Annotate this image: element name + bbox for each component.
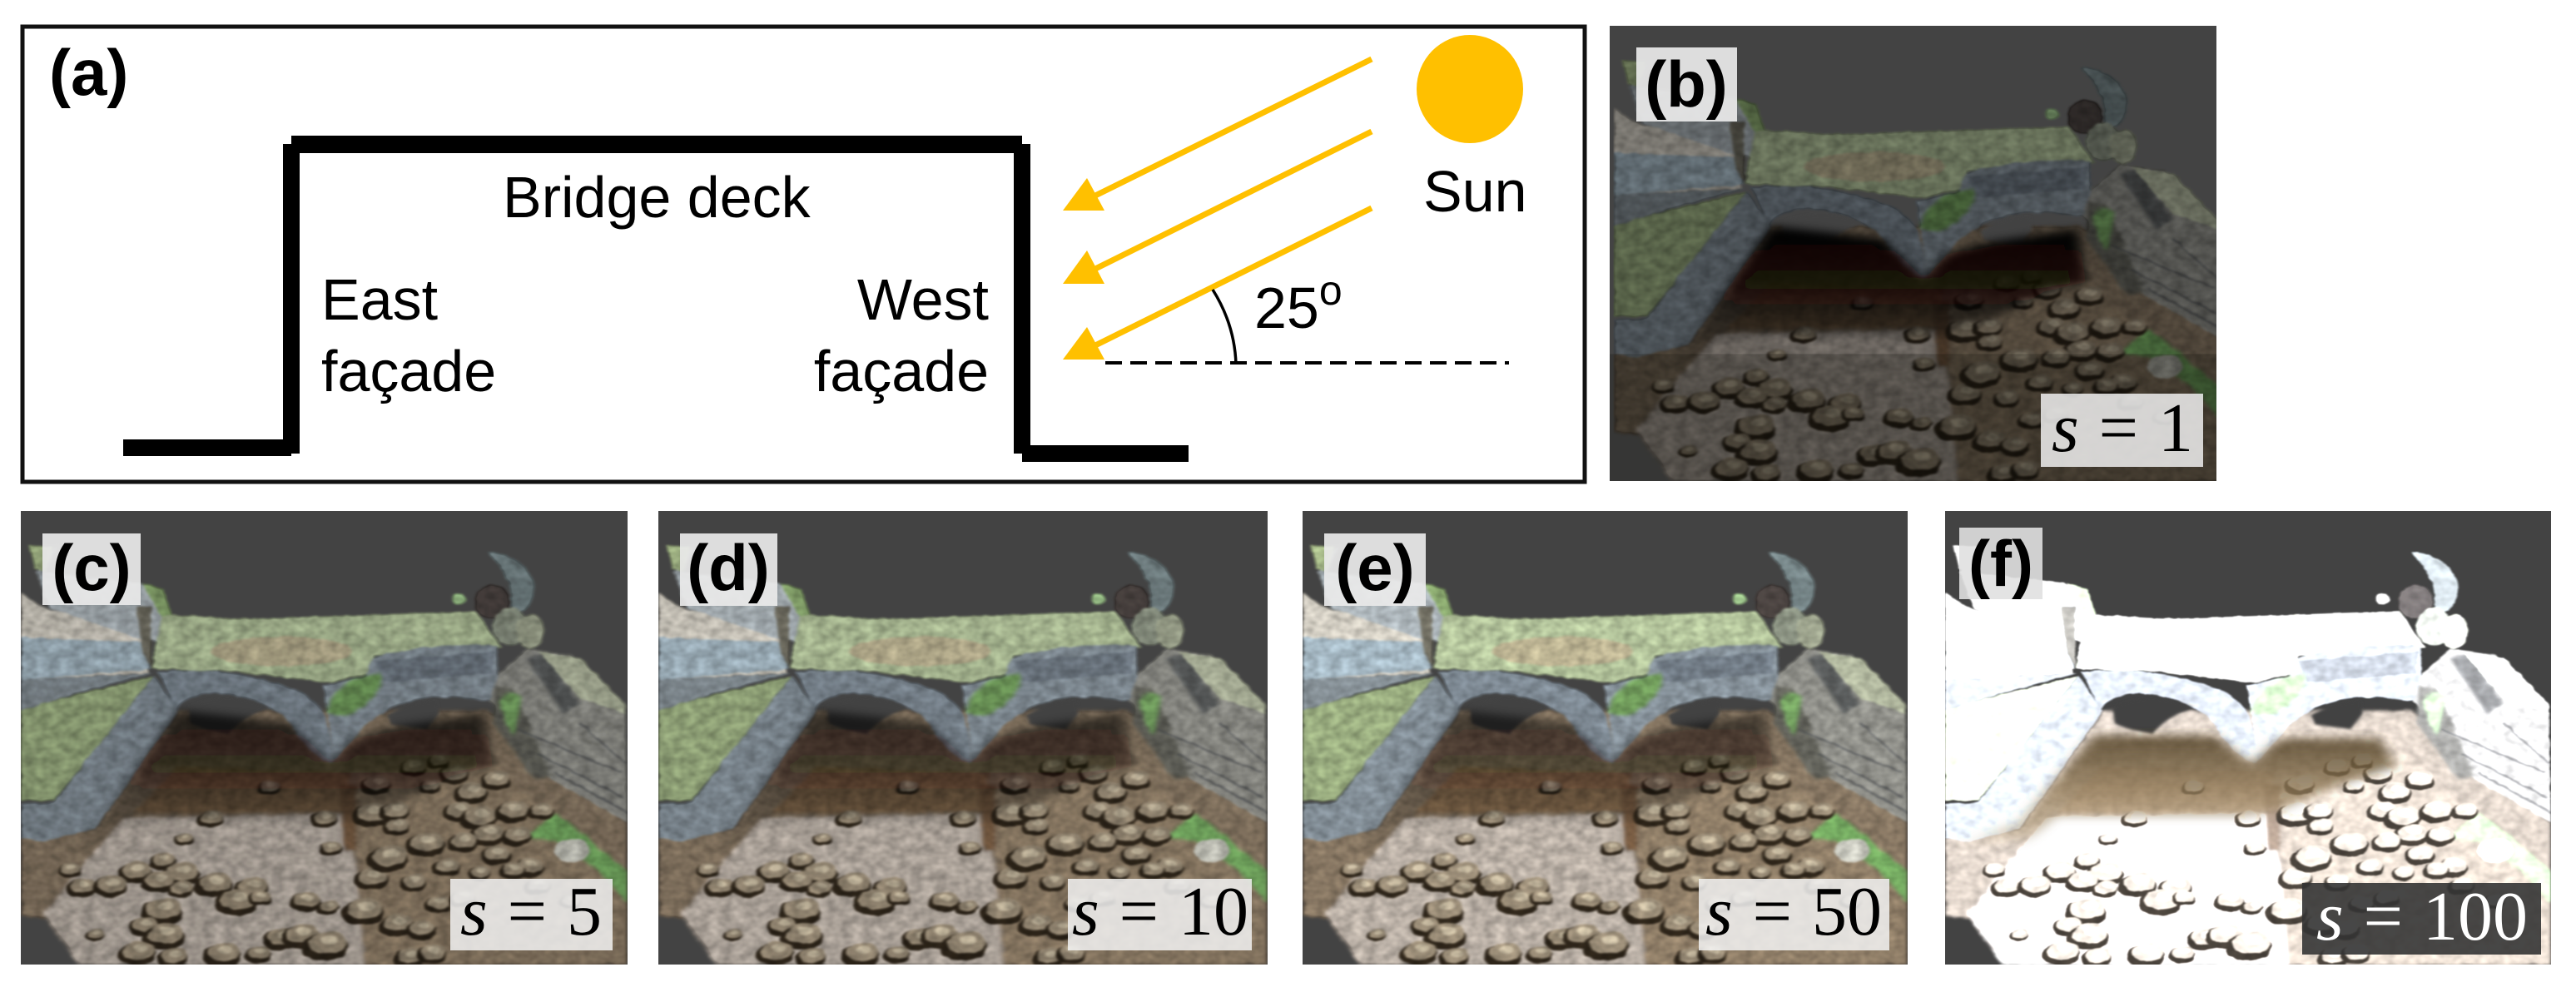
value s=1: s = 1 [2052, 389, 2193, 467]
panel (b): render at s=1 [1610, 26, 2221, 484]
panel (a): bridge cross-section diagram [22, 27, 1585, 482]
bridge outline [123, 136, 1189, 462]
value s=5: s = 5 [460, 873, 602, 950]
text: west facade: façade [814, 339, 989, 404]
text: east facade: façade [321, 339, 496, 404]
value s=10: s = 10 [1072, 873, 1248, 950]
text: sun: Sun [1423, 159, 1527, 224]
dashed horizontal reference [1105, 361, 1509, 365]
label (a): (a) [49, 36, 128, 109]
label (d): (d) [687, 531, 770, 604]
text: west facade: West [857, 267, 989, 332]
label (f): (f) [1968, 527, 2033, 600]
value s=50: s = 50 [1705, 873, 1882, 950]
label (e): (e) [1335, 531, 1415, 604]
panel (f): render at s=100 [1945, 511, 2551, 967]
label (c): (c) [52, 531, 132, 604]
arrow: sun ray 3 [1063, 208, 1372, 360]
text: east facade: East [321, 267, 438, 332]
text: 25 degree angle: o [1319, 267, 1343, 314]
text: 25 degree angle: 25 [1254, 275, 1319, 340]
arrow: sun ray 2 [1063, 131, 1372, 284]
value s=100: s = 100 [2316, 878, 2528, 955]
diagram frame [22, 27, 1585, 482]
label (b): (b) [1645, 47, 1728, 121]
angle arc [1213, 290, 1236, 365]
panel (e): render at s=50 [1303, 511, 1908, 967]
panel (c): render at s=5 [21, 511, 628, 967]
icon: sun [1417, 35, 1523, 143]
arrow: sun ray 1 [1063, 59, 1372, 211]
panel (d): render at s=10 [658, 511, 1268, 967]
text: bridge deck: Bridge deck [503, 165, 812, 230]
